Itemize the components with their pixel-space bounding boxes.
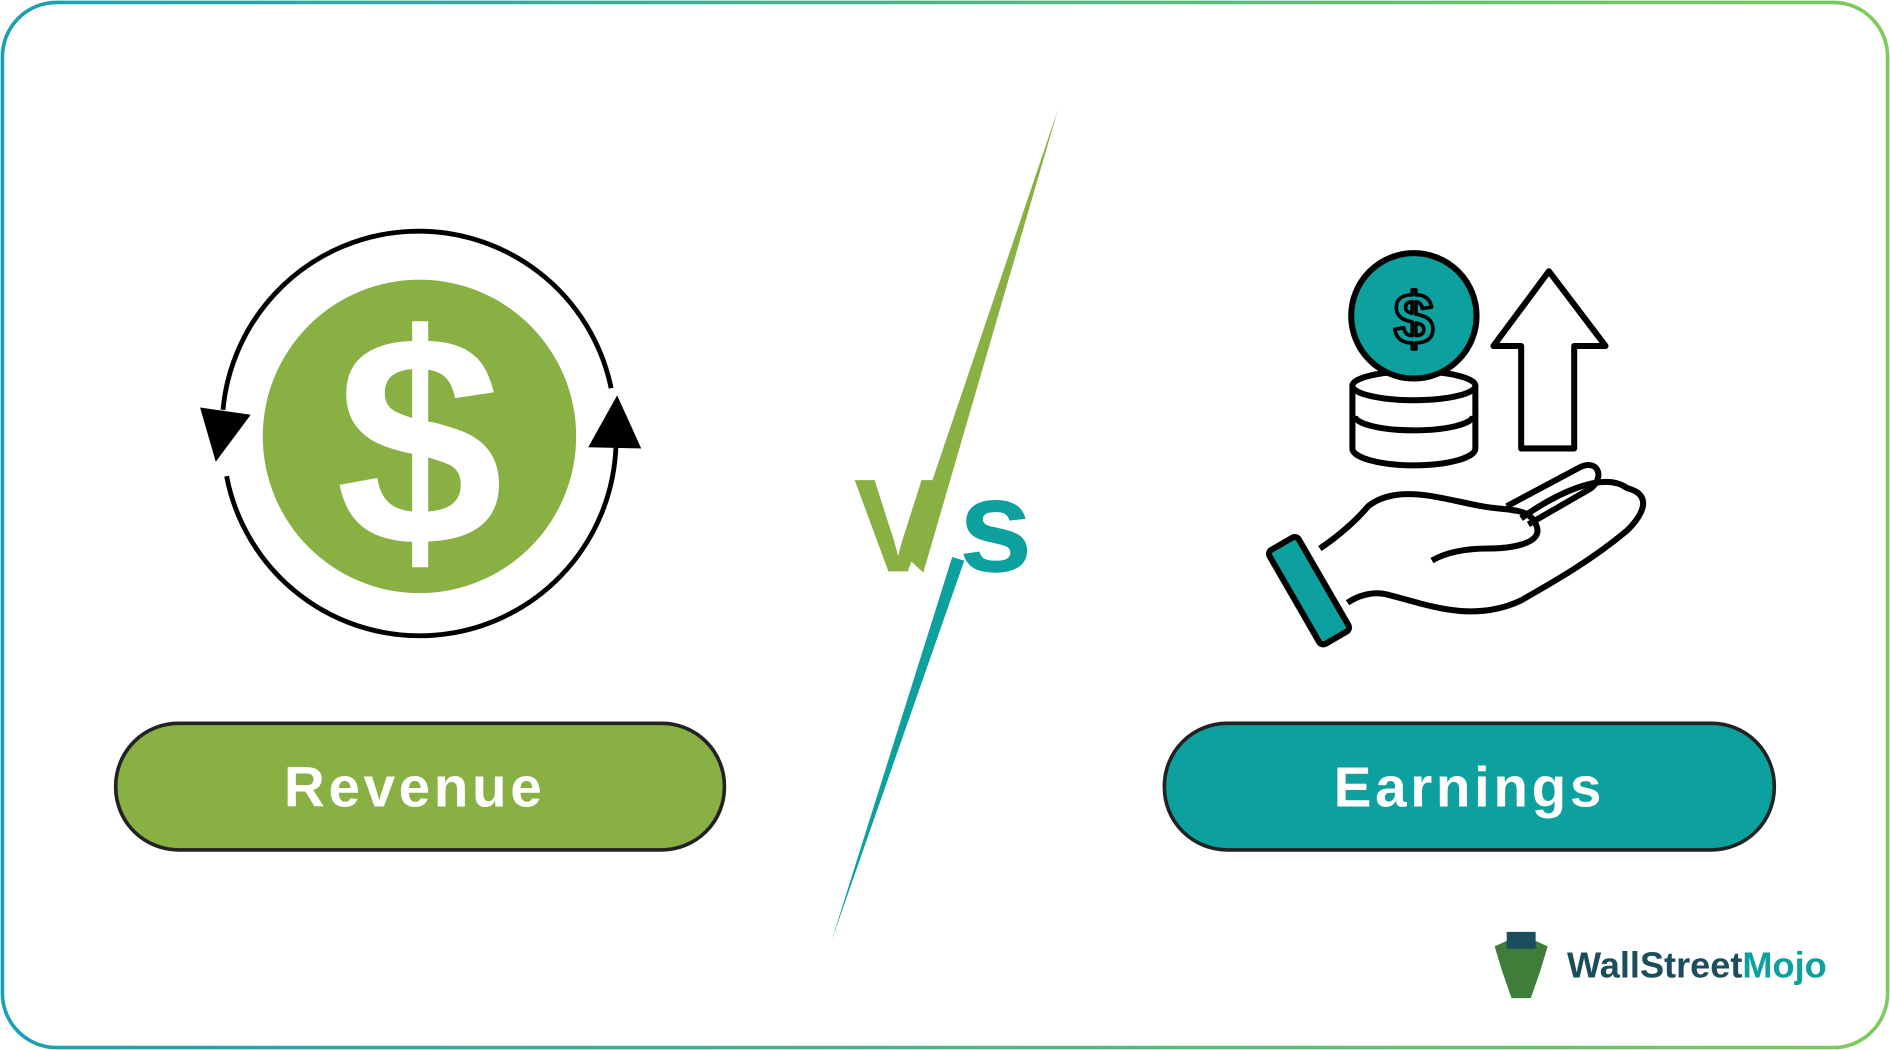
icon: earnings hand with coins and arrow: $: [1394, 280, 1434, 360]
vs divider: [832, 108, 1058, 940]
logo: WallStreetMojo: [1495, 932, 1827, 998]
button: Revenue: Revenue: [284, 756, 545, 819]
logo: WallStreetMojo: WallStreetMojo: [1567, 945, 1827, 986]
icon: revenue dollar cycle: $: [336, 272, 503, 609]
icon: earnings hand with coins and arrow: [1267, 253, 1643, 646]
button: Earnings: [1164, 723, 1774, 850]
button: Earnings: Earnings: [1334, 756, 1605, 819]
vs divider: V: [854, 452, 942, 600]
button: Revenue: [116, 723, 724, 850]
vs divider: s: [959, 452, 1032, 600]
icon: revenue dollar cycle: [200, 231, 641, 636]
